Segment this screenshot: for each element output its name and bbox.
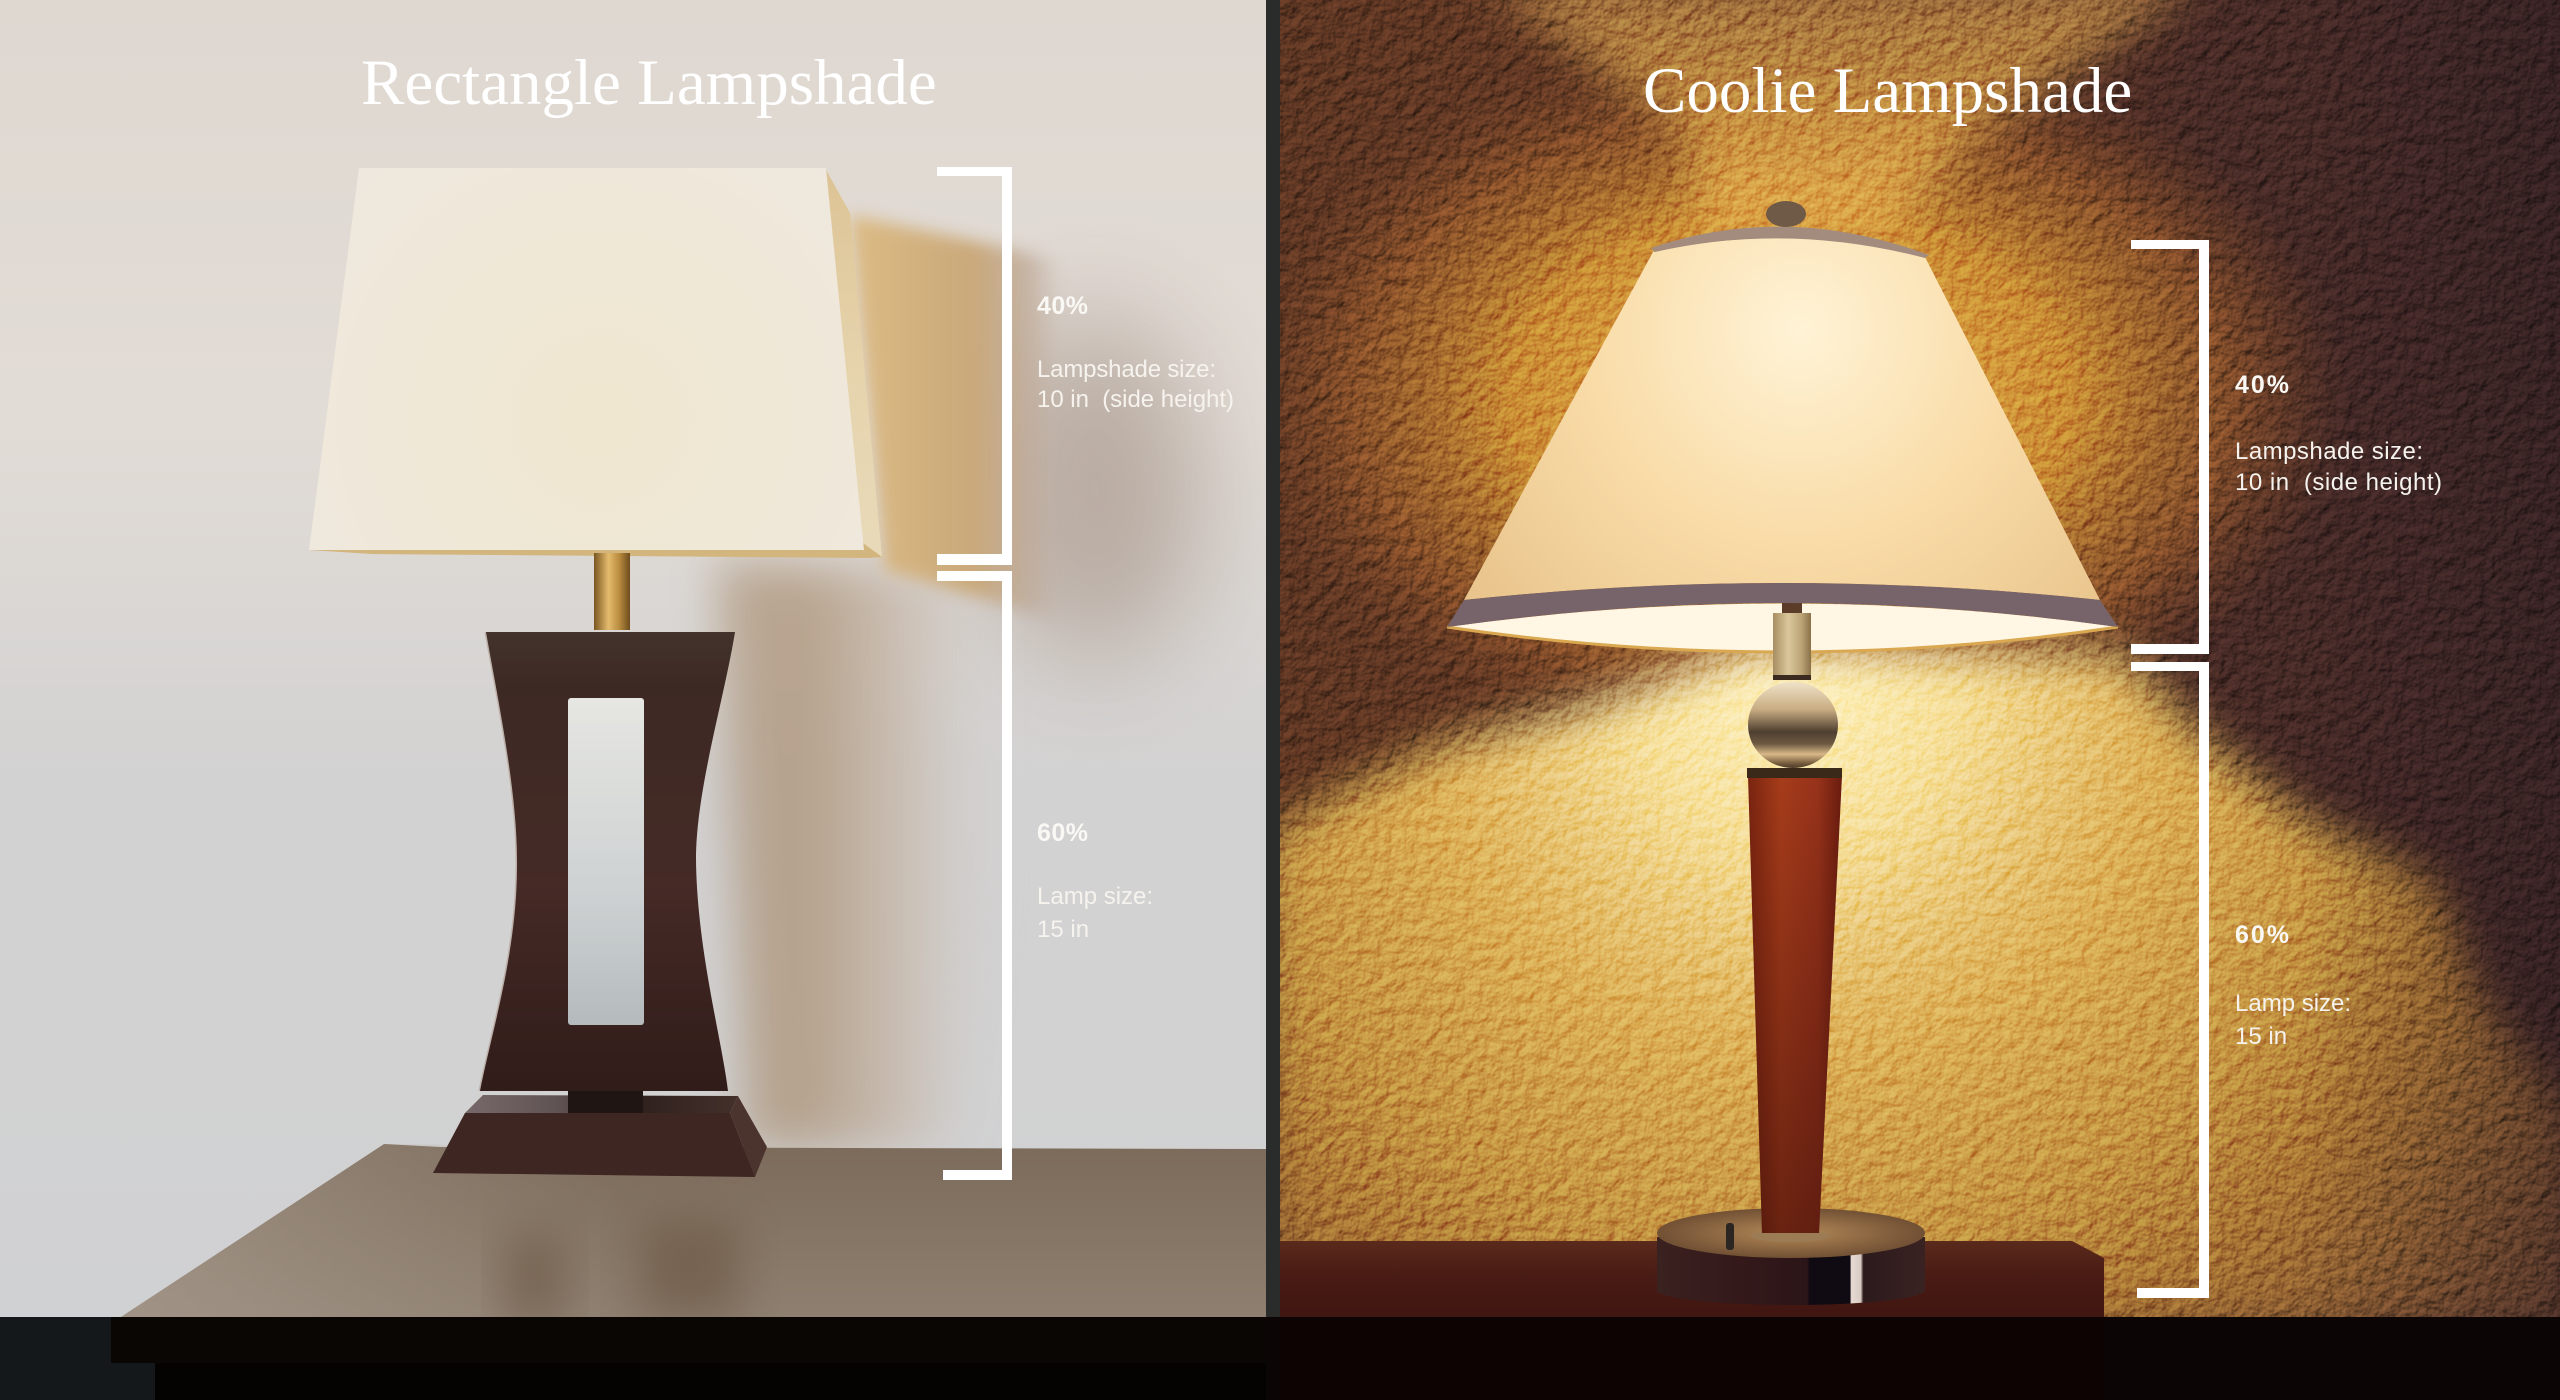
- annotation: rectangle shade: Lampshade size:: [1037, 356, 1216, 383]
- base right side: [730, 1096, 767, 1177]
- shade bottom trim: [1447, 583, 2118, 627]
- panel: rectangle lampshade photo: [0, 0, 1268, 1400]
- upper light cone: [1484, 0, 2202, 230]
- shade opening: [1447, 604, 2118, 652]
- bracket: coolie shade 40%: [2131, 240, 2209, 654]
- table front edge: [111, 1317, 1266, 1363]
- stem lower shading: [1748, 776, 1842, 1233]
- title: Coolie Lampshade: Coolie Lampshade: [1643, 55, 2132, 127]
- metal neck: [1773, 613, 1811, 680]
- warm lamp shadow behind body: [716, 560, 1000, 1148]
- lower light cone: [1262, 645, 2560, 1335]
- annotation: coolie lamp: 60%: [2235, 921, 2289, 949]
- table leg shadow: [155, 1363, 1266, 1400]
- table reflection right: [640, 1220, 740, 1320]
- annotation: rectangle shade: 10 in (side height): [1037, 386, 1234, 413]
- divider between panels: [1266, 0, 1280, 1400]
- right band background: [1266, 1317, 2560, 1400]
- annotation: rectangle shade: 40%: [1037, 292, 1088, 320]
- base top: [1657, 1208, 1925, 1258]
- annotation: rectangle shade: [1037, 292, 1234, 413]
- shade top trim: [1651, 227, 1929, 258]
- annotation: coolie lamp: [2235, 921, 2351, 1050]
- annotation: coolie shade: Lampshade size:: [2235, 438, 2423, 465]
- annotation: coolie shade: [2235, 371, 2442, 496]
- warm lamp shadow behind shade: [850, 215, 1060, 620]
- shade fabric: [1464, 238, 2100, 600]
- shade underside: [309, 543, 882, 558]
- right side darkening: [2300, 0, 2560, 1330]
- lamp base: [1657, 1208, 1925, 1305]
- lamp body window: [568, 698, 644, 1025]
- shade right side: [825, 168, 882, 557]
- bracket: rectangle shade 40%: [937, 167, 1012, 565]
- annotation: coolie lamp: 15 in: [2235, 1023, 2287, 1050]
- bracket: coolie lamp 60%: [2131, 662, 2209, 1298]
- grey wall shadow: [990, 315, 1200, 665]
- base front: [433, 1113, 755, 1177]
- bottom dark band: [0, 1317, 2560, 1400]
- stucco texture: [1280, 0, 2560, 1320]
- annotation: rectangle lamp: 60%: [1037, 819, 1088, 847]
- toggle switch: [1726, 1223, 1734, 1250]
- table left sheen: [122, 1144, 491, 1317]
- table top: [121, 1144, 1268, 1317]
- base side: [1657, 1237, 1925, 1305]
- right table shadow: [1280, 1317, 2104, 1400]
- annotation: coolie shade: 40%: [2235, 371, 2289, 399]
- title: Rectangle Lampshade: Rectangle Lampshade: [361, 47, 937, 119]
- wall background: [0, 0, 1268, 1400]
- table reflection left: [505, 1235, 565, 1325]
- lamp body: [480, 632, 735, 1091]
- dark wall: [1280, 0, 2560, 1400]
- left band background: [0, 1317, 1266, 1400]
- shade halo glow: [1230, 30, 2350, 770]
- stem collar ring: [1750, 1230, 1830, 1242]
- shade front: [309, 168, 864, 550]
- annotation: coolie lamp: Lamp size:: [2235, 990, 2351, 1017]
- base top plate: [465, 1095, 738, 1113]
- neck finial: [1782, 602, 1802, 613]
- finial: [1766, 201, 1806, 227]
- opening gold rim: [1447, 627, 2118, 652]
- annotation: rectangle lamp: Lamp size:: [1037, 883, 1153, 910]
- annotation: rectangle lamp: 15 in: [1037, 916, 1089, 943]
- neck ring: [1773, 675, 1811, 680]
- tapered wood stem: [1748, 776, 1842, 1233]
- stem collar: [1747, 768, 1842, 778]
- lamp body highlight: [480, 632, 517, 1091]
- bracket: rectangle lamp 60%: [937, 571, 1012, 1180]
- annotation: coolie shade: 10 in (side height): [2235, 469, 2442, 496]
- panel: coolie lampshade photo: [1230, 0, 2560, 1400]
- annotation: rectangle lamp: [1037, 819, 1153, 943]
- metal sphere: [1748, 682, 1838, 768]
- connector: [568, 1091, 643, 1113]
- side table: [1280, 1241, 2104, 1320]
- brass neck: [594, 553, 630, 630]
